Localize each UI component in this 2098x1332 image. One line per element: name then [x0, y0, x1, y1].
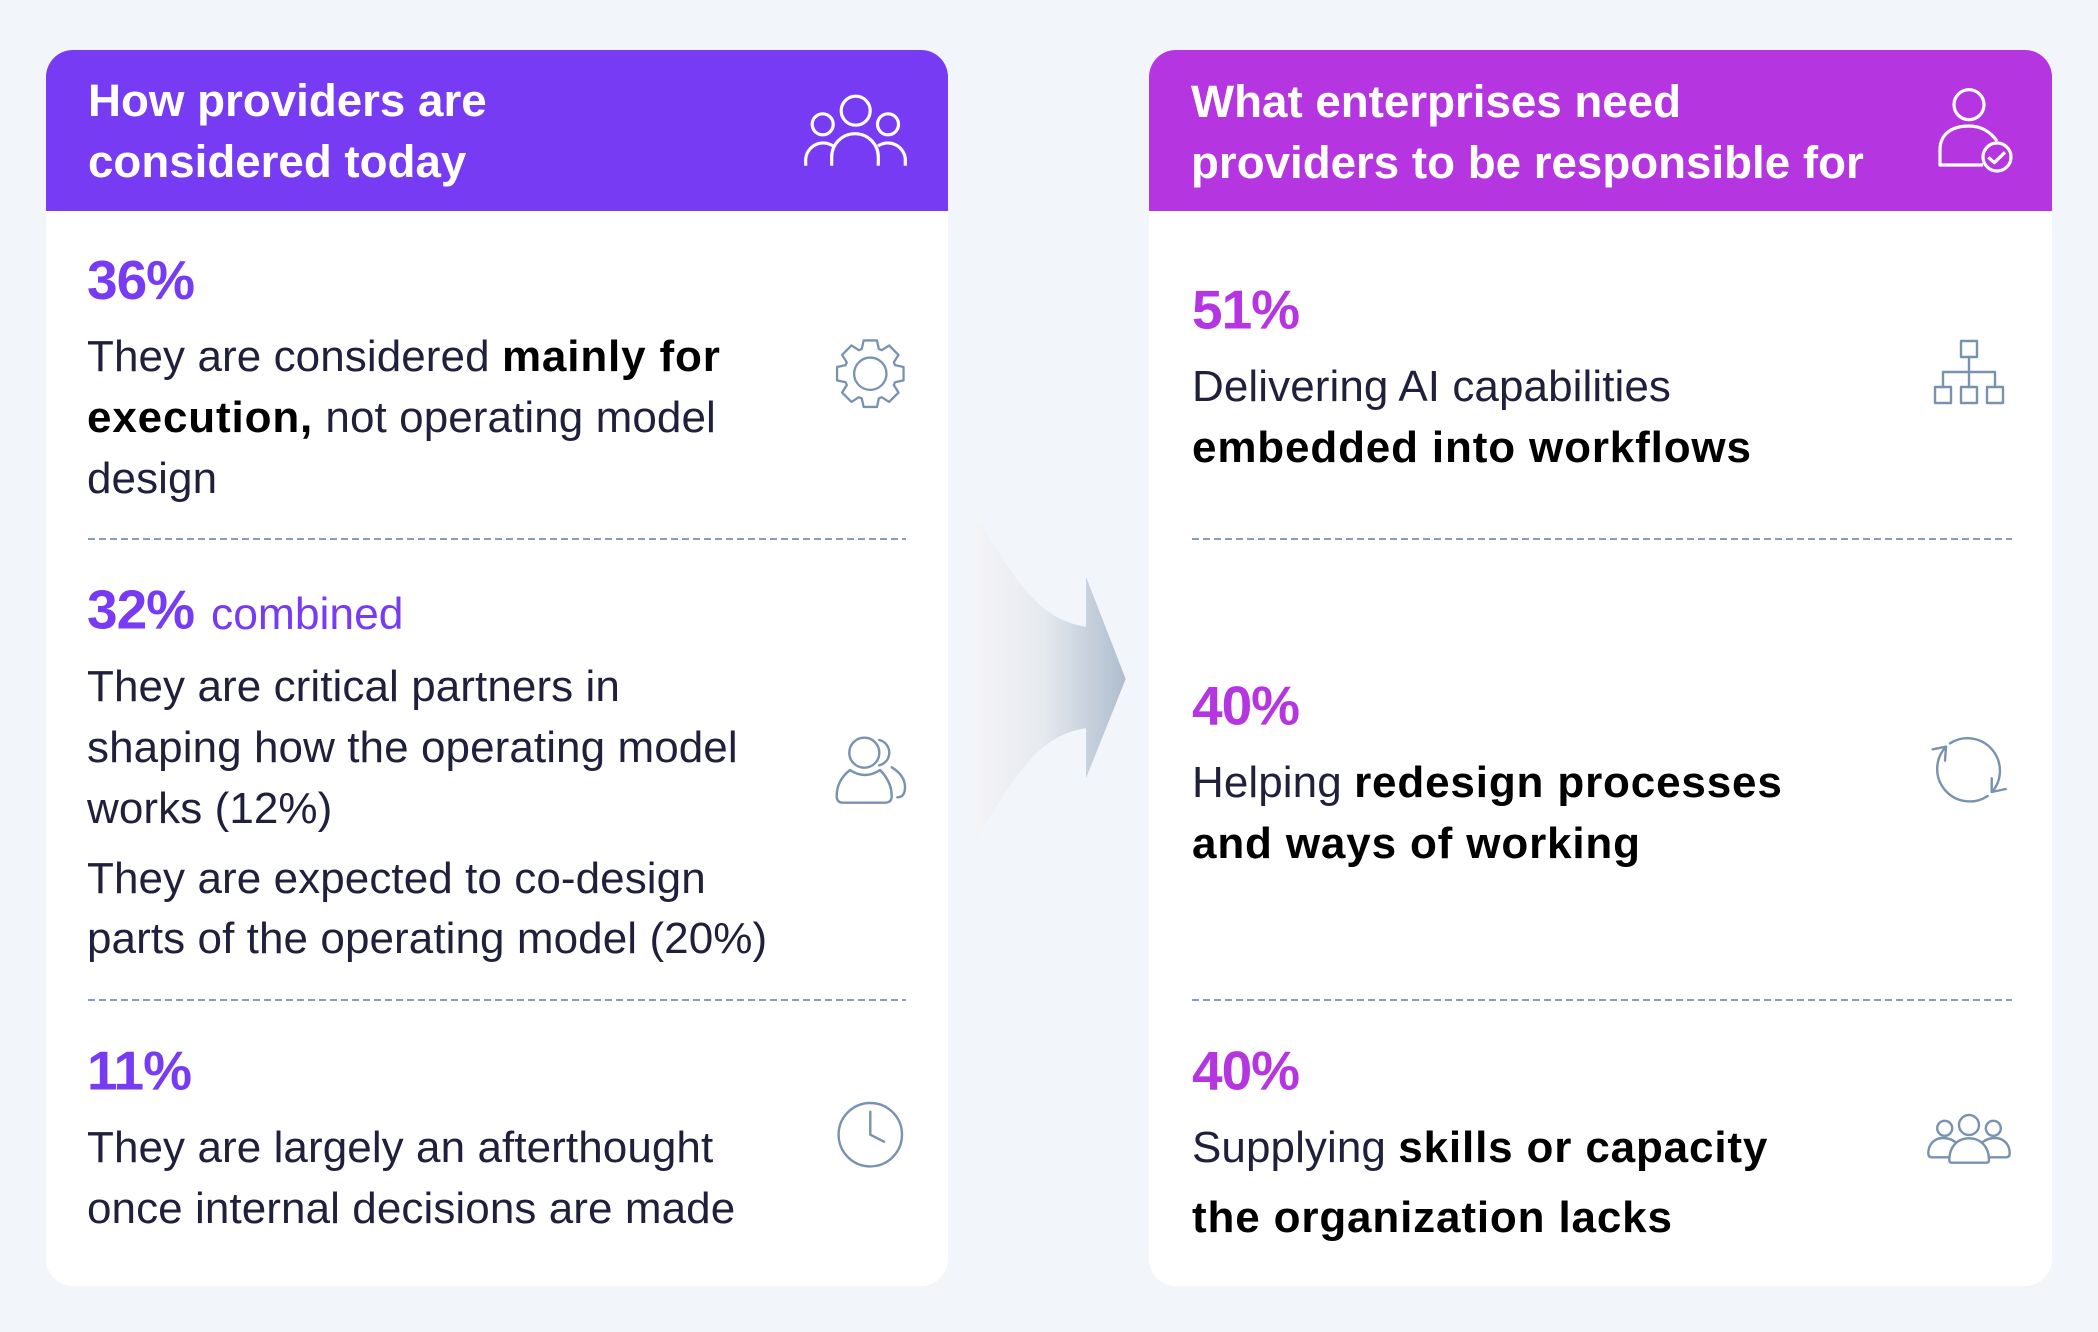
stat: 36%: 36%: [87, 249, 194, 311]
stat: 32% combined: shaping how the operating model: [87, 723, 738, 772]
left heading: considered today: [88, 136, 467, 187]
panel: how providers are considered today: [46, 50, 948, 1286]
icon: org chart: [1935, 341, 2003, 403]
left panel header: [46, 50, 948, 211]
stat: 11%: 11%: [87, 1040, 191, 1102]
arrow: [976, 515, 1126, 840]
panel: what enterprises need: [1149, 50, 2052, 1286]
need: 51%: [1192, 278, 1752, 472]
stat: 36%: [87, 249, 721, 503]
icon: person with check: [1940, 90, 2011, 171]
stat: 11%: They are largely an afterthought: [87, 1123, 713, 1172]
stat: 11%: once internal decisions are made: [87, 1184, 735, 1233]
right panel header: [1149, 50, 2052, 211]
stat: 36%: They are considered: [87, 332, 502, 381]
stat: 32% combined: parts of the operating model (20%): [87, 914, 767, 963]
need: 40% redesign: 40%: [1192, 674, 1299, 736]
need: 40% skills: the organization lacks: [1192, 1193, 1673, 1242]
stat: 36%: design: [87, 454, 217, 503]
icon: three people: [1928, 1115, 2010, 1163]
stat: 32% combined: 32%: [87, 578, 194, 640]
stat: 32% combined: combined: [211, 590, 403, 639]
icon: clock: [839, 1103, 902, 1166]
stat: 32% combined: [86, 578, 767, 963]
stat: 32% combined: They are critical partners in: [87, 662, 620, 711]
need: 40% skills: [1192, 1040, 1768, 1242]
stat: 36%: execution,: [87, 393, 313, 442]
icon: group of people: [806, 96, 905, 166]
need: 40% redesign: redesign processes: [1354, 758, 1783, 807]
left heading: How providers are: [88, 75, 487, 126]
icon: gear: [837, 340, 904, 407]
right heading: providers to be responsible for: [1191, 137, 1864, 188]
need: 51%: 51%: [1192, 278, 1299, 340]
need: 51%: Delivering AI capabilities: [1192, 362, 1671, 411]
need: 51%: embedded into workflows: [1192, 423, 1752, 472]
stat: 32% combined: works (12%): [86, 784, 332, 833]
stat: 36%: mainly for: [502, 332, 721, 381]
need: 40% skills: skills or capacity: [1398, 1123, 1768, 1172]
need: 40% redesign: Helping: [1192, 758, 1354, 807]
need: 40% skills: 40%: [1192, 1040, 1299, 1102]
icon: refresh cycle: [1933, 738, 2006, 801]
need: 40% redesign: [1192, 674, 1783, 868]
right heading: What enterprises need: [1191, 76, 1681, 127]
need: 40% redesign: and ways of working: [1192, 819, 1641, 868]
icon: two people: [837, 738, 905, 803]
need: 40% skills: Supplying: [1192, 1123, 1398, 1172]
stat: 36%: not operating model: [313, 393, 716, 442]
stat: 32% combined: They are expected to co-design: [87, 854, 706, 903]
stat: 11%: [87, 1040, 735, 1233]
